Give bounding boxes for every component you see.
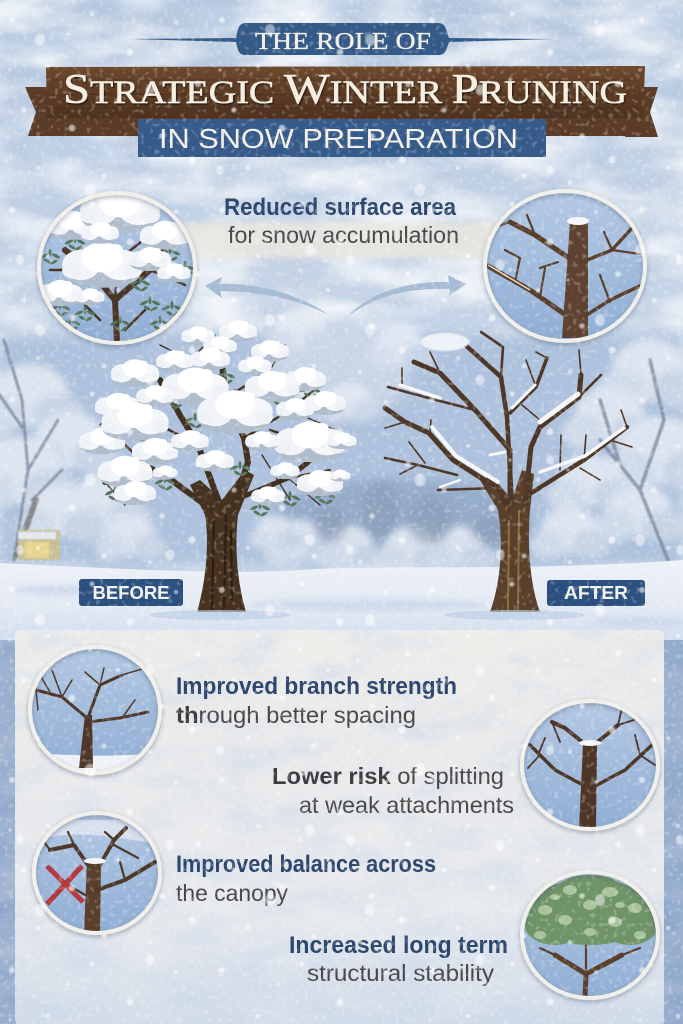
snowy ground <box>0 560 683 640</box>
ribbon tails <box>25 87 658 137</box>
benefit 3: balance across canopy: Improved balance across <box>176 851 436 878</box>
caption: reduced surface area <box>175 194 500 258</box>
bottom panel <box>15 630 664 1024</box>
benefit 1: branch strength <box>28 644 457 780</box>
benefit 2: lower risk of splitting: Lower risk of splitting <box>272 763 504 789</box>
after label: AFTER <box>564 583 628 603</box>
arrow right <box>347 275 466 317</box>
benefit 4: long term stability: Increased long term <box>289 932 508 959</box>
benefit 1: branch strength: Improved branch strength <box>176 673 457 700</box>
after label <box>547 580 645 606</box>
icon: removed branch with red cross <box>33 812 163 934</box>
icon: spaced branches <box>28 644 162 780</box>
wood sign: STRATEGIC WINTER PRUNING <box>63 67 627 113</box>
tree before pruning <box>79 320 357 612</box>
benefit 1: branch strength: through better spacing <box>176 702 416 728</box>
benefit 3: balance across canopy: the canopy <box>176 880 288 906</box>
benefit 4: long term stability <box>289 870 660 1002</box>
winter forest backdrop <box>0 309 683 575</box>
caption: reduced surface area: Reduced surface area <box>224 194 457 221</box>
before label: BEFORE <box>92 583 170 603</box>
title <box>25 23 658 157</box>
thumbnail: unpruned canopy <box>37 187 197 346</box>
tree after pruning <box>385 332 632 612</box>
subtitle plaque: IN SNOW PREPARATION <box>159 123 518 154</box>
header plaque: the role of: THE ROLE OF <box>255 29 431 55</box>
benefit 2: lower risk of splitting <box>272 699 660 833</box>
caption: reduced surface area: for snow accumulation <box>228 222 459 248</box>
ground trunk shadows <box>150 610 585 620</box>
before label <box>79 579 183 606</box>
subtitle plaque <box>138 119 546 157</box>
arrow left <box>205 277 329 315</box>
thumbnail: pruned branches <box>483 190 647 346</box>
icon: healthy green tree <box>520 870 660 1002</box>
benefit 3: balance across canopy <box>33 812 436 934</box>
icon: cut leader <box>520 699 660 833</box>
header plaque: the role of <box>130 23 552 55</box>
house <box>18 530 60 560</box>
benefit 4: long term stability: structural stability <box>307 960 494 986</box>
benefit 2: lower risk of splitting: at weak attachments <box>299 792 514 818</box>
